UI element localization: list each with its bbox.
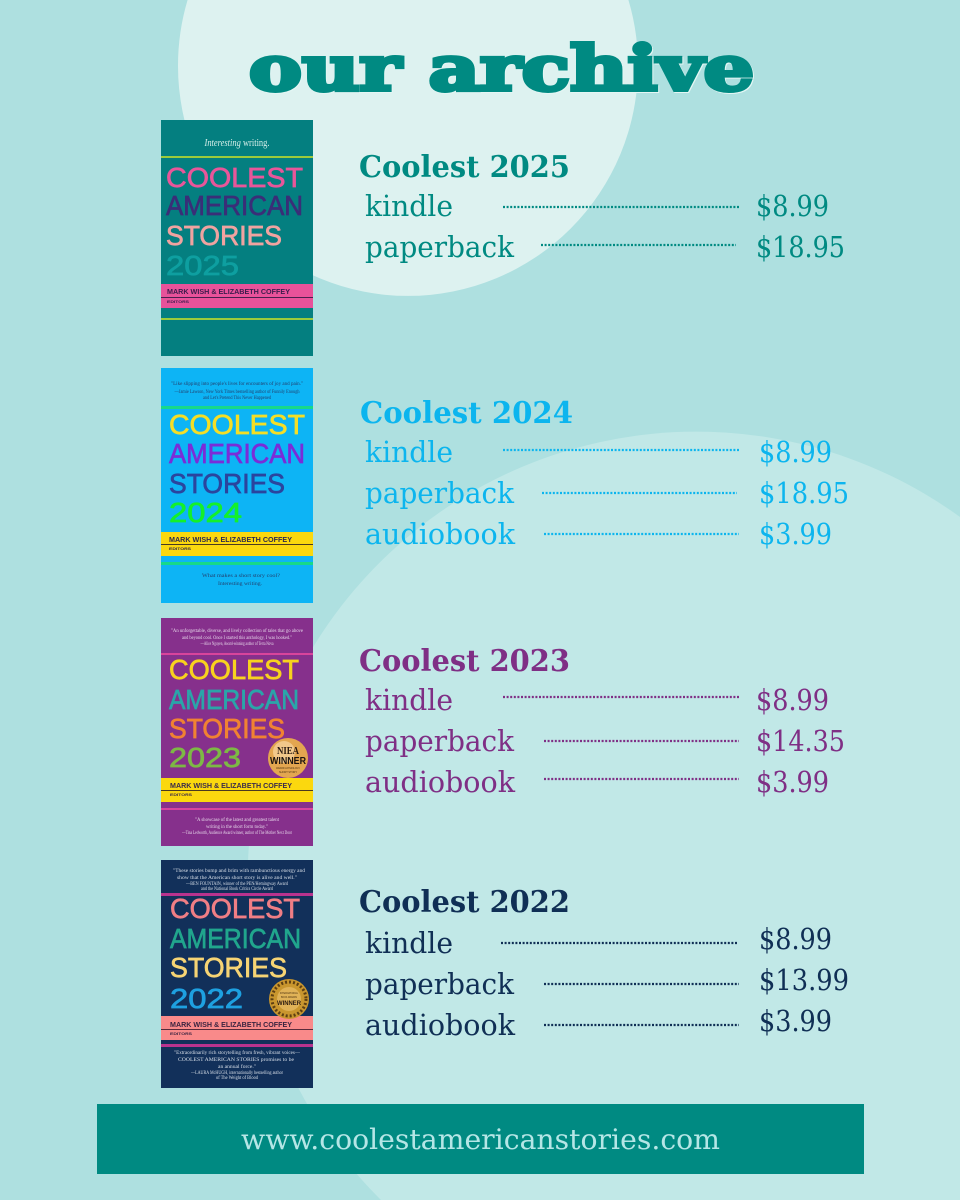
book cover: Coolest 2022: COOLEST AMERICAN STORIES promises to be bbox=[178, 1058, 295, 1063]
book entry: Coolest 2025 prices: Coolest 2025 bbox=[359, 149, 570, 184]
book entry: Coolest 2025 prices bbox=[359, 149, 845, 264]
icon: award winner laurel medal: WINNER bbox=[277, 1000, 301, 1007]
book cover: Coolest 2022: STORIES bbox=[170, 952, 287, 983]
book cover: Coolest 2024: 2024 bbox=[169, 497, 242, 528]
book cover: Coolest 2023: and beyond cool. Once I started this anthology, I was hooked." bbox=[182, 636, 292, 641]
book entry: Coolest 2025 prices: $18.95 bbox=[756, 230, 845, 264]
book entry: Coolest 2022 prices: $8.99 bbox=[759, 922, 832, 956]
book cover: Coolest 2024: "Like slipping into people's lives for encounters of joy and pain." bbox=[171, 382, 303, 387]
book cover: Coolest 2025: EDITORS bbox=[167, 299, 189, 304]
title: our archive bbox=[250, 33, 755, 106]
book cover: Coolest 2024 bbox=[161, 368, 313, 603]
book entry: Coolest 2025 prices: $8.99 bbox=[756, 189, 829, 223]
icon: award winner laurel medal: BOOK AWARDS bbox=[281, 995, 297, 999]
book entry: Coolest 2023 prices: audiobook bbox=[365, 765, 515, 799]
book cover: Coolest 2025: AMERICAN bbox=[166, 190, 303, 221]
icon: award winner laurel medal bbox=[269, 979, 309, 1019]
book entry: Coolest 2022 prices: paperback bbox=[365, 967, 514, 1001]
book entry: Coolest 2023 prices: $14.35 bbox=[756, 724, 845, 758]
icon: NIEA winner medal: AWARD ANTHOLOGY bbox=[276, 766, 300, 770]
book entry: Coolest 2023 prices bbox=[359, 643, 845, 799]
book cover: Coolest 2022: "Extraordinarily rich storytelling from fresh, vibrant voices— bbox=[174, 1051, 301, 1056]
book cover: Coolest 2022: COOLEST bbox=[170, 893, 300, 924]
book cover: Coolest 2025: MARK WISH & ELIZABETH COFFEY bbox=[167, 289, 290, 296]
book entry: Coolest 2023 prices: paperback bbox=[365, 724, 514, 758]
book entry: Coolest 2024 prices: $8.99 bbox=[759, 435, 832, 469]
icon: NIEA winner medal: SHORT STORY bbox=[279, 770, 297, 774]
book cover: Coolest 2025: Interesting writing. bbox=[204, 138, 270, 149]
book cover: Coolest 2025: COOLEST bbox=[166, 162, 303, 193]
book entry: Coolest 2025 prices: kindle bbox=[365, 189, 453, 223]
book cover: Coolest 2022: and the National Book Critics Circle Award bbox=[201, 887, 273, 892]
book entry: Coolest 2023 prices: $3.99 bbox=[756, 765, 829, 799]
book cover: Coolest 2023 bbox=[161, 618, 313, 846]
book cover: Coolest 2022: 2022 bbox=[170, 983, 243, 1014]
book entry: Coolest 2024 prices: paperback bbox=[365, 476, 514, 510]
book entry: Coolest 2022 prices bbox=[359, 884, 849, 1042]
book cover: Coolest 2022: an annual force." bbox=[218, 1065, 256, 1070]
book entry: Coolest 2025 prices: paperback bbox=[365, 230, 514, 264]
icon: NIEA winner medal: NIEA bbox=[277, 745, 299, 757]
book cover: Coolest 2024: Interesting writing. bbox=[218, 582, 262, 587]
book entry: Coolest 2022 prices: $3.99 bbox=[759, 1004, 832, 1038]
book entry: Coolest 2024 prices: kindle bbox=[365, 435, 453, 469]
book cover: Coolest 2022 bbox=[161, 860, 313, 1088]
book entry: Coolest 2022 prices: Coolest 2022 bbox=[359, 884, 570, 919]
footer website banner bbox=[97, 1104, 864, 1174]
book cover: Coolest 2024: COOLEST bbox=[169, 409, 305, 440]
book cover: Coolest 2025: 2025 bbox=[166, 250, 239, 281]
book entry: Coolest 2024 prices: audiobook bbox=[365, 517, 515, 551]
book entry: Coolest 2023 prices: Coolest 2023 bbox=[359, 643, 570, 678]
book cover: Coolest 2024: and Let's Pretend This Never Happened bbox=[203, 396, 271, 401]
book cover: Coolest 2022: of The Weight of Blood bbox=[216, 1076, 258, 1081]
book cover: Coolest 2024: STORIES bbox=[169, 468, 285, 499]
footer website banner: www.coolestamericanstories.com bbox=[241, 1123, 720, 1156]
book cover: Coolest 2022: show that the American short story is alive and well." bbox=[177, 876, 297, 881]
book cover: Coolest 2022: MARK WISH & ELIZABETH COFFEY bbox=[170, 1022, 292, 1029]
book cover: Coolest 2024: MARK WISH & ELIZABETH COFFEY bbox=[169, 537, 292, 544]
book cover: Coolest 2022: "These stories bump and brim with rambunctious energy and bbox=[173, 869, 306, 874]
book cover: Coolest 2022: EDITORS bbox=[170, 1031, 192, 1036]
book cover: Coolest 2025: STORIES bbox=[166, 220, 282, 251]
book cover: Coolest 2023: AMERICAN bbox=[169, 684, 299, 715]
book cover: Coolest 2023: —Alice Nguyen, Award-winning author of Terra Nova bbox=[200, 642, 274, 647]
book cover: Coolest 2022: —LAURA McHUGH, internationally bestselling author bbox=[190, 1071, 283, 1076]
book cover: Coolest 2022: —BEN FOUNTAIN, winner of the PEN/Hemingway Award bbox=[185, 882, 288, 887]
title: our archive bbox=[249, 32, 754, 105]
book cover: Coolest 2025 bbox=[161, 120, 313, 356]
book entry: Coolest 2024 prices: $18.95 bbox=[759, 476, 849, 510]
book cover: Coolest 2022: AMERICAN bbox=[170, 923, 301, 954]
book cover: Coolest 2023: —Tina Ledworth, Audience Award winner, author of The Mother Next Door bbox=[181, 831, 292, 836]
icon: award winner laurel medal: INTERNATIONAL bbox=[280, 991, 298, 995]
icon: NIEA winner medal: WINNER bbox=[270, 756, 307, 767]
book cover: Coolest 2024: EDITORS bbox=[169, 546, 191, 551]
book cover: Coolest 2024: —Jamie Lawson, New York Times bestselling author of Funnily Enough bbox=[174, 390, 300, 395]
book cover: Coolest 2023: STORIES bbox=[169, 713, 285, 744]
book cover: Coolest 2023: EDITORS bbox=[170, 792, 192, 797]
book entry: Coolest 2024 prices: $3.99 bbox=[759, 517, 832, 551]
book entry: Coolest 2024 prices: Coolest 2024 bbox=[360, 395, 573, 430]
book cover: Coolest 2023: COOLEST bbox=[169, 654, 299, 685]
book entry: Coolest 2022 prices: audiobook bbox=[365, 1008, 515, 1042]
book entry: Coolest 2023 prices: kindle bbox=[365, 683, 453, 717]
book cover: Coolest 2023: 2023 bbox=[169, 742, 241, 773]
book entry: Coolest 2024 prices bbox=[360, 395, 849, 551]
icon: NIEA winner medal bbox=[268, 738, 308, 778]
book cover: Coolest 2024: What makes a short story cool? bbox=[202, 574, 281, 579]
book entry: Coolest 2022 prices: $13.99 bbox=[759, 963, 849, 997]
book cover: Coolest 2023: MARK WISH & ELIZABETH COFFEY bbox=[170, 783, 292, 790]
book cover: Coolest 2023: "A showcase of the latest and greatest talent bbox=[195, 818, 280, 823]
book cover: Coolest 2023: writing in the short form today." bbox=[206, 825, 268, 830]
book entry: Coolest 2022 prices: kindle bbox=[365, 926, 453, 960]
book entry: Coolest 2023 prices: $8.99 bbox=[756, 683, 829, 717]
book cover: Coolest 2023: "An unforgettable, diverse, and lively collection of tales that go above bbox=[171, 629, 304, 634]
book cover: Coolest 2024: AMERICAN bbox=[169, 438, 305, 469]
